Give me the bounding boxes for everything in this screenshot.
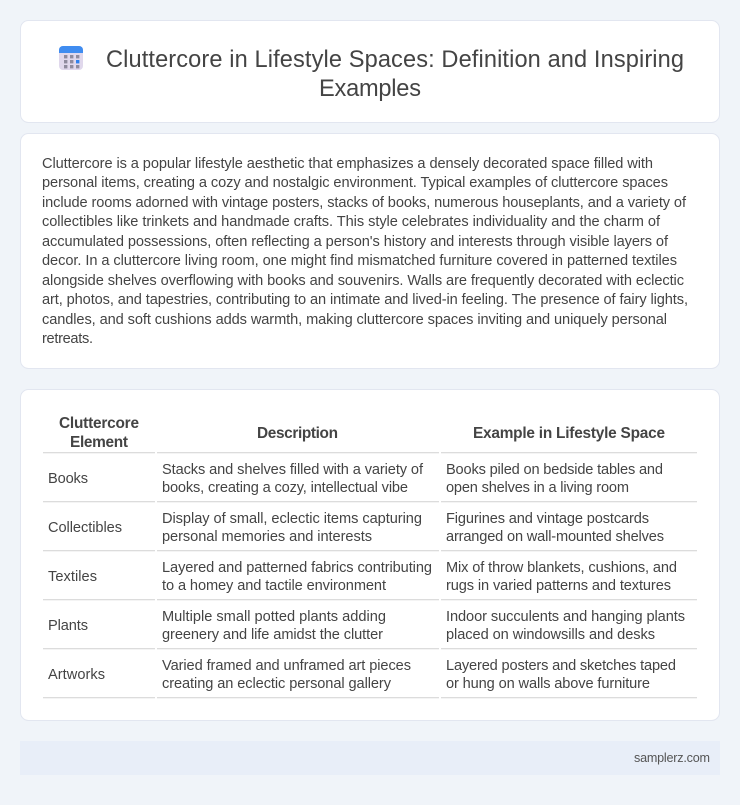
table row: Books: open shelves in a living room [446,480,629,496]
table row: Collectibles: Collectibles [48,520,122,536]
table row: Plants: Multiple small potted plants adding [162,609,386,625]
table row: Plants [48,609,685,643]
table row: Collectibles: Display of small, eclectic items capturing [162,511,422,527]
table row: Textiles [48,560,677,594]
table row: Books [48,462,663,496]
table row: Collectibles: personal memories and interests [162,529,372,545]
panel: title header [20,20,720,122]
table row: Artworks: Layered posters and sketches taped [446,658,676,674]
table row: Textiles: to a homey and tactile environment [162,578,386,594]
table header row: Example in Lifestyle Space [473,425,665,442]
text block: description paragraph: retreats. [42,331,93,347]
text block: description paragraph: alongside shelves overflowing with books and souvenirs. Walls are frequently decorated with eclectic [42,273,684,289]
panel: table [20,390,720,720]
title: Cluttercore in Lifestyle Spaces: Definition and Inspiring [106,47,684,73]
table header row: Element [70,434,128,451]
table row: Artworks [48,658,676,692]
table row: Books: Books piled on bedside tables and [446,462,663,478]
table header row: Description [257,425,338,442]
table row: Collectibles [48,511,664,545]
table header row [59,415,665,451]
table row: Plants: greenery and life amidst the clutter [162,627,383,643]
table row: Artworks: or hung on walls above furniture [446,676,650,692]
table row: Textiles: Textiles [48,569,97,585]
table header row: Cluttercore [59,415,139,432]
footer source text: samplerz.com [634,751,710,765]
table row: Plants: Indoor succulents and hanging plants [446,609,685,625]
table row lines [43,452,697,698]
table row: Books: Books [48,471,88,487]
table row: Textiles: rugs in varied patterns and textures [446,578,671,594]
text block: description paragraph: candles, and soft cushions adds warmth, making cluttercore spaces inviting and uniquely personal [42,312,667,328]
text block: description paragraph: collectibles like trinkets and handmade crafts. This style celebrates individuality and the charm of [42,214,661,230]
table row: Books: Stacks and shelves filled with a variety of [162,462,424,478]
text block: description paragraph [42,156,688,347]
table row: Artworks: Varied framed and unframed art pieces [162,658,411,674]
text block: description paragraph: decor. In a cluttercore living room, one might find mismatched furniture covered in patterned textiles [42,253,677,269]
text block: description paragraph: personal items, creating a cozy and nostalgic environment. Typical examples of cluttercore spaces [42,175,668,191]
icon: calendar [59,46,83,70]
table row: Plants: Plants [48,618,88,634]
text block: description paragraph: art, photos, and tapestries, contributing to an intimate and lived-in feeling. The presence of fairy lights, [42,292,688,308]
text block: description paragraph: include rooms adorned with vintage posters, stacks of books, numerous houseplants, and a variety of [42,195,687,211]
table row: Artworks: creating an eclectic personal gallery [162,676,392,692]
panel: description [20,134,720,368]
table row: Textiles: Mix of throw blankets, cushions, and [446,560,677,576]
text block: description paragraph: accumulated possessions, often reflecting a person's history and interests through visible layers of [42,234,669,250]
table row: Collectibles: Figurines and vintage postcards [446,511,649,527]
title [106,47,684,102]
table row: Books: books, creating a cozy, intellectual vibe [162,480,408,496]
footer bar [20,741,720,775]
table row: Artworks: Artworks [48,667,105,683]
text block: description paragraph: Cluttercore is a popular lifestyle aesthetic that emphasizes a densely decorated space filled with [42,156,653,172]
table row: Collectibles: arranged on wall-mounted shelves [446,529,664,545]
table row: Plants: placed on windowsills and desks [446,627,655,643]
title: Examples [319,76,421,102]
table row: Textiles: Layered and patterned fabrics contributing [162,560,432,576]
